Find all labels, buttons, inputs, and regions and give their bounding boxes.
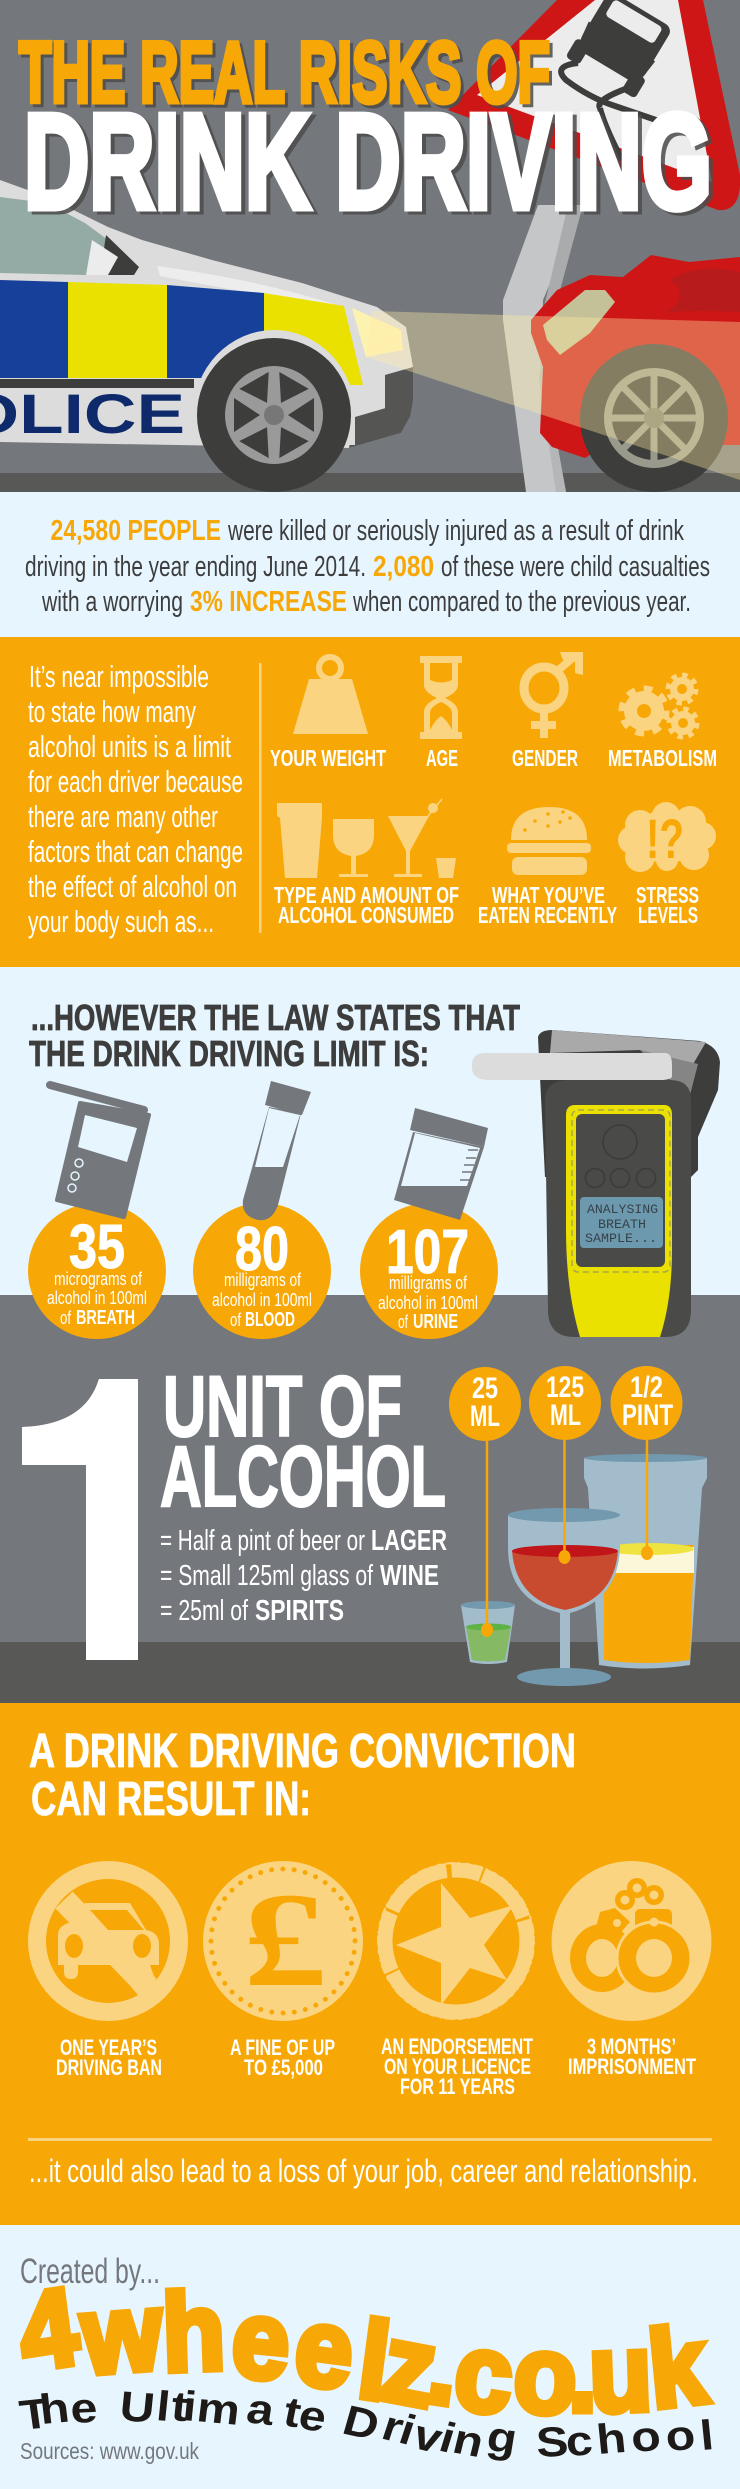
label: endorsement xyxy=(381,2034,533,2099)
icon: metabolism gears xyxy=(622,675,697,737)
heading: unit of alcohol: ALCOHOL xyxy=(160,1429,446,1525)
panel: hero illustration xyxy=(0,0,740,492)
circle: 35 breath: BREATH xyxy=(76,1307,135,1329)
label: type and amount of alcohol: TYPE AND AMOUNT OF xyxy=(274,882,459,908)
icon: wine glass xyxy=(508,1508,620,1686)
label: driving ban: DRIVING BAN xyxy=(56,2055,162,2080)
icon: shot glass xyxy=(461,1601,515,1664)
callout: 125 ml: 125 xyxy=(546,1371,584,1404)
label: stress levels: LEVELS xyxy=(638,902,698,928)
label: type and amount of alcohol xyxy=(274,882,459,928)
intro paragraph: there are many other xyxy=(28,799,218,834)
circle: 80 blood: alcohol in 100ml xyxy=(212,1290,312,1310)
callout: 25 ml: 25 xyxy=(472,1372,498,1405)
circle: 107 urine: URINE xyxy=(413,1311,458,1333)
label: endorsement: ON YOUR LICENCE xyxy=(384,2054,531,2079)
breathalyser screen text: ANALYSING xyxy=(587,1202,658,1217)
callout: 125 ml xyxy=(529,1366,601,1564)
icon: red crashed car xyxy=(531,255,740,492)
icon: police car xyxy=(0,180,413,492)
unit equivalents list: = 25ml of xyxy=(160,1595,249,1627)
heading: unit of alcohol xyxy=(160,1359,446,1525)
icon: breathalyser xyxy=(472,1030,720,1337)
icon: pound coin xyxy=(203,1861,363,2021)
heading: unit of alcohol: UNIT OF xyxy=(163,1359,402,1455)
label: age: AGE xyxy=(426,745,458,771)
icon: driving ban xyxy=(28,1861,188,2021)
label: fine xyxy=(230,2035,335,2080)
panel: casualty statistics xyxy=(0,492,740,637)
label: stress levels xyxy=(636,882,699,928)
sources: Sources: www.gov.uk xyxy=(20,2438,199,2464)
icon: weight xyxy=(293,657,368,734)
heading: legal limit: THE DRINK DRIVING LIMIT IS: xyxy=(29,1033,429,1074)
intro paragraph: factors that can change xyxy=(28,834,243,869)
callout: half pint xyxy=(610,1366,682,1560)
circle: 35 breath: alcohol in 100ml xyxy=(47,1288,147,1308)
label: your weight: YOUR WEIGHT xyxy=(270,745,386,771)
panel: casualty statistics: 2,080 xyxy=(373,551,434,583)
label: driving ban xyxy=(56,2035,162,2080)
unit equivalents list xyxy=(160,1525,447,1627)
label: driving ban: ONE YEAR’S xyxy=(60,2035,157,2060)
circle: 80 blood: of xyxy=(230,1310,242,1330)
icon: stress cloud xyxy=(618,802,716,872)
unit equivalents list: = Half a pint of beer or xyxy=(160,1525,365,1557)
panel: casualty statistics: with a worrying xyxy=(41,586,183,618)
panel: conviction consequences xyxy=(0,1703,740,2225)
intro paragraph xyxy=(28,659,243,939)
panel: casualty statistics: driving in the year ending June 2014. xyxy=(25,551,366,583)
circle: 80 blood xyxy=(193,1203,331,1339)
panel: casualty statistics: 24,580 PEOPLE xyxy=(50,515,221,547)
label: imprisonment: 3 MONTHS’ xyxy=(587,2034,676,2059)
icon: licence endorsement stamp xyxy=(378,1863,534,2019)
intro paragraph: It’s near impossible xyxy=(29,659,209,694)
intro paragraph: to state how many xyxy=(28,694,196,729)
heading: conviction: A DRINK DRIVING CONVICTION xyxy=(29,1725,576,1778)
intro paragraph: for each driver because xyxy=(28,764,243,799)
circle: 107 urine: milligrams of xyxy=(389,1273,468,1293)
label: stress levels: STRESS xyxy=(636,882,699,908)
icon: pint glass xyxy=(584,1454,707,1668)
label: gender: GENDER xyxy=(512,745,578,771)
label: what you've eaten xyxy=(478,882,617,928)
panel: casualty statistics: 3% INCREASE xyxy=(190,586,347,618)
icon: breath test device xyxy=(50,1085,149,1217)
icon: gender symbol xyxy=(524,652,583,738)
icon: stress cloud: !? xyxy=(646,807,684,870)
intro paragraph: alcohol units is a limit xyxy=(28,729,231,764)
icon: pound coin: £ xyxy=(243,1866,327,2015)
icon: alcohol drinks xyxy=(277,799,456,878)
circle: 35 breath: micrograms of xyxy=(54,1269,143,1289)
intro paragraph: your body such as... xyxy=(28,904,214,939)
heading: conviction xyxy=(29,1725,576,1826)
panel: legal limit xyxy=(0,967,740,1345)
label: fine: TO £5,000 xyxy=(244,2055,323,2080)
callout: 125 ml: ML xyxy=(550,1399,581,1432)
circle: 107 urine xyxy=(360,1203,498,1339)
circle: 107 urine: of xyxy=(398,1312,409,1332)
circle: 107 urine: alcohol in 100ml xyxy=(378,1293,478,1313)
label: endorsement: AN ENDORSEMENT xyxy=(381,2034,533,2059)
panel: one unit of alcohol xyxy=(0,1345,740,1703)
label: type and amount of alcohol: ALCOHOL CONSUMED xyxy=(278,902,454,928)
created by: Created by... xyxy=(20,2252,160,2291)
circle: 80 blood: milligrams of xyxy=(224,1270,302,1290)
breathalyser screen text xyxy=(585,1202,658,1246)
circle: 35 breath: of xyxy=(60,1308,72,1328)
unit equivalents list: = Small 125ml glass of xyxy=(160,1560,374,1592)
breathalyser mouthpiece xyxy=(472,1053,672,1080)
icon: blood test tube xyxy=(243,1081,311,1220)
icon: warning road sign xyxy=(448,0,740,210)
circle: 35 breath: 35 xyxy=(69,1213,125,1282)
icon: hourglass xyxy=(420,656,462,739)
icon: skidding car xyxy=(565,0,676,99)
unit equivalents list: LAGER xyxy=(371,1525,447,1557)
circle: 35 breath xyxy=(28,1203,166,1339)
label: what you've eaten: EATEN RECENTLY xyxy=(478,902,617,928)
panel: footer credits xyxy=(0,2225,740,2489)
circle: 107 urine: 107 xyxy=(386,1218,469,1287)
callout: half pint: 1/2 xyxy=(630,1371,663,1404)
breathalyser screen text: BREATH xyxy=(598,1217,646,1232)
label: imprisonment: IMPRISONMENT xyxy=(568,2054,696,2079)
icon: skid marks xyxy=(561,63,662,160)
icon: handcuffs xyxy=(552,1861,712,2021)
label: what you've eaten: WHAT YOU’VE xyxy=(492,882,605,908)
logo tagline: The Ultimate Driving School xyxy=(17,2382,716,2466)
circle: 80 blood: BLOOD xyxy=(245,1309,295,1331)
heading: conviction: CAN RESULT IN: xyxy=(31,1773,311,1826)
callout: half pint: PINT xyxy=(622,1399,673,1432)
intro paragraph: the effect of alcohol on xyxy=(28,869,237,904)
label: endorsement: FOR 11 YEARS xyxy=(400,2074,515,2099)
logo: 4wheelz.co.uk: 4wheelz.co.uk xyxy=(12,2264,713,2438)
breathalyser screen text: SAMPLE... xyxy=(585,1231,657,1246)
unit equivalents list: WINE xyxy=(380,1560,439,1592)
headlight beam xyxy=(366,311,740,480)
circle: 80 blood: 80 xyxy=(235,1215,289,1284)
unit equivalents list: SPIRITS xyxy=(255,1595,344,1627)
heading: legal limit xyxy=(29,997,520,1074)
icon: urine sample jar xyxy=(394,1108,488,1220)
heading: legal limit: ...HOWEVER THE LAW STATES THAT xyxy=(31,997,520,1038)
callout: 25 ml: ML xyxy=(470,1400,500,1433)
icon: burger xyxy=(507,807,591,875)
panel: factors affecting alcohol limit xyxy=(0,637,740,967)
label: fine: A FINE OF UP xyxy=(230,2035,335,2060)
icon: sign pole xyxy=(503,205,583,492)
callout: 25 ml xyxy=(449,1367,521,1637)
label: imprisonment xyxy=(568,2034,696,2079)
title xyxy=(19,25,716,240)
